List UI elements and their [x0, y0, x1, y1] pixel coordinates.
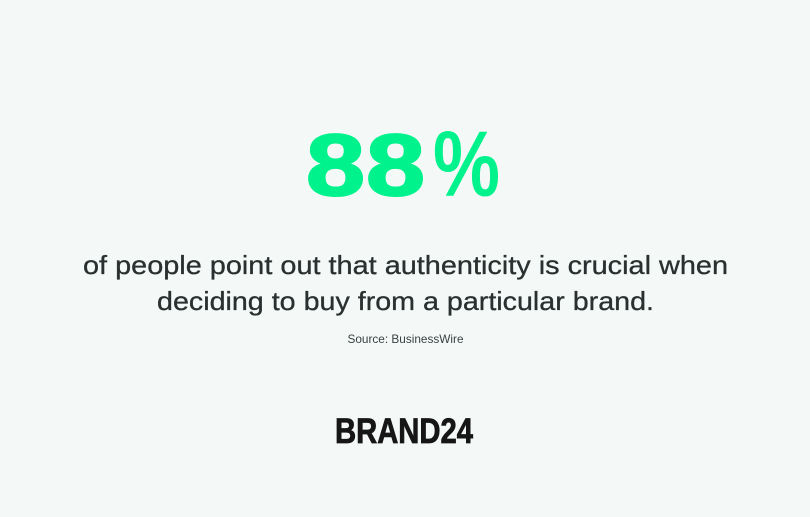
description text: deciding to buy from a particular brand. — [157, 286, 654, 316]
logo: BRAND24: BRAND24 — [335, 412, 473, 451]
source note: Source: BusinessWire — [348, 332, 464, 346]
description text: of people point out that authenticity is crucial when — [83, 250, 728, 280]
headline statistic: 88%: 8 — [306, 116, 365, 214]
description text — [83, 250, 728, 316]
headline statistic: 88%: 8 — [366, 116, 425, 214]
headline statistic: 88% — [306, 112, 500, 216]
headline statistic: 88%: % — [433, 112, 500, 216]
